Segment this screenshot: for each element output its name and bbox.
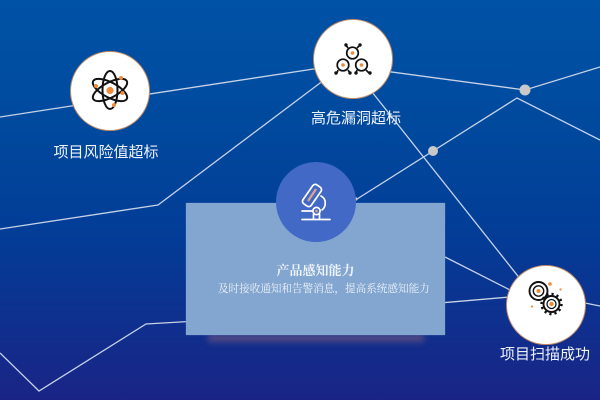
- label: project risk: 项目风险值超标: [53, 144, 158, 161]
- label: high-risk vulnerabilities: 高危漏洞超标: [311, 110, 401, 127]
- panel text: 及时接收通知和告警消息，提高系统感知能力: [218, 284, 430, 295]
- node: upper right: [520, 84, 530, 96]
- panel: product awareness: [186, 203, 445, 335]
- panel heading: 产品感知能力: [276, 263, 354, 278]
- label: scan success: 项目扫描成功: [500, 346, 590, 363]
- panel glow: [208, 335, 424, 345]
- node: middle right: [428, 146, 438, 156]
